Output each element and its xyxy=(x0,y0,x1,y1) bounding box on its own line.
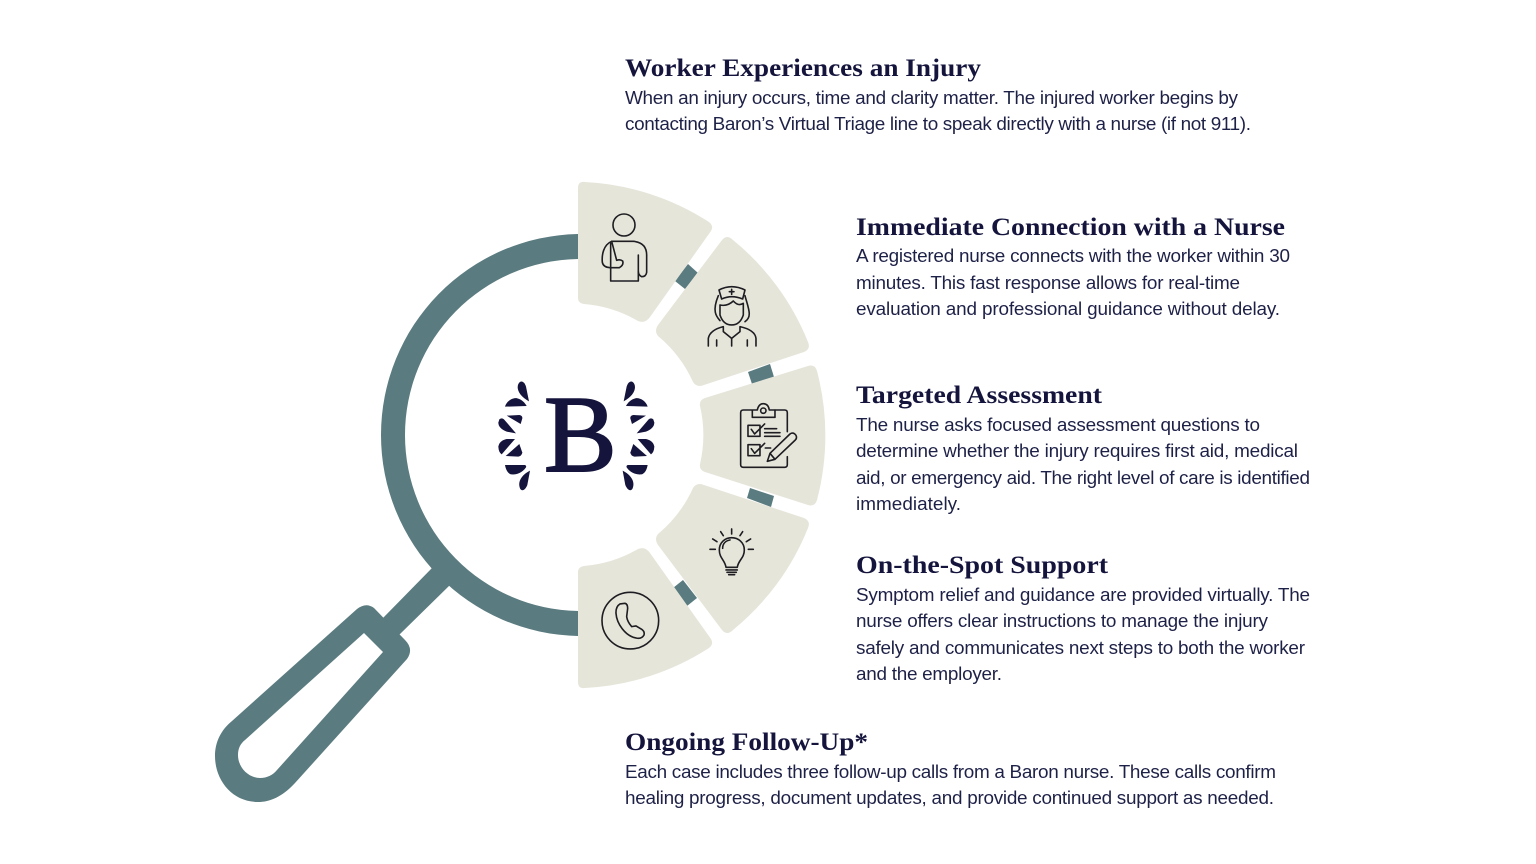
text block: ongoing follow-up: Ongoing Follow-Up* xyxy=(625,727,868,756)
logo xyxy=(498,374,654,495)
logo right laurel xyxy=(623,381,654,490)
text block: on-the-spot support: Symptom relief and guidance are provided virtually. The xyxy=(856,585,1310,606)
text block: on-the-spot support xyxy=(856,550,1310,685)
text block: immediate connection with a nurse: A registered nurse connects with the worker within 30 xyxy=(856,246,1290,267)
text block: targeted assessment xyxy=(856,380,1310,515)
logo letter B: B xyxy=(544,374,617,495)
text block: targeted assessment: determine whether the injury requires first aid, medical xyxy=(856,441,1298,462)
text block: immediate connection with a nurse xyxy=(856,212,1290,320)
icon: injured person with sling xyxy=(602,214,647,281)
text block: targeted assessment: The nurse asks focused assessment questions to xyxy=(856,415,1260,436)
logo left laurel xyxy=(498,381,530,490)
text block: on-the-spot support: and the employer. xyxy=(856,664,1002,685)
text block: ongoing follow-up xyxy=(625,727,1276,809)
panel: on-the-spot support segment xyxy=(656,484,809,633)
text block: targeted assessment: Targeted Assessment xyxy=(856,380,1103,409)
text block: targeted assessment: immediately. xyxy=(856,494,961,515)
text block: worker experiences an injury: contacting Baron’s Virtual Triage line to speak directly with a nurse (if not 911). xyxy=(625,114,1251,135)
text block: immediate connection with a nurse: Immediate Connection with a Nurse xyxy=(856,212,1285,241)
text block: immediate connection with a nurse: evaluation and professional guidance without delay. xyxy=(856,299,1280,320)
icon: clipboard checklist xyxy=(741,404,797,467)
text block: worker experiences an injury: Worker Experiences an Injury xyxy=(625,53,981,82)
icon: telephone xyxy=(602,592,659,649)
handle grip xyxy=(215,605,410,802)
text block: on-the-spot support: safely and communicates next steps to both the worker xyxy=(856,638,1305,659)
segment connectors xyxy=(673,264,774,606)
text block: worker experiences an injury: When an injury occurs, time and clarity matter. The injured worker begins by xyxy=(625,88,1239,109)
text block: on-the-spot support: On-the-Spot Support xyxy=(856,550,1109,579)
panel: follow-up segment xyxy=(578,548,712,688)
text block: ongoing follow-up: Each case includes three follow-up calls from a Baron nurse. These calls confirm xyxy=(625,762,1276,783)
panel: nurse connection segment xyxy=(656,237,809,386)
text block: immediate connection with a nurse: minutes. This fast response allows for real-time xyxy=(856,273,1240,294)
handle stem xyxy=(383,568,450,635)
lens ring xyxy=(381,234,578,636)
panel: targeted assessment segment xyxy=(700,366,825,505)
panel: worker injury segment xyxy=(578,182,712,322)
text block: worker experiences an injury xyxy=(625,53,1251,135)
text block: targeted assessment: aid, or emergency aid. The right level of care is identified xyxy=(856,468,1310,489)
text block: on-the-spot support: nurse offers clear instructions to manage the injury xyxy=(856,611,1269,632)
magnifying glass xyxy=(215,234,578,802)
icon: light bulb xyxy=(710,529,753,575)
text block: ongoing follow-up: healing progress, document updates, and provide continued support as needed. xyxy=(625,788,1274,809)
icon: nurse xyxy=(708,287,756,346)
